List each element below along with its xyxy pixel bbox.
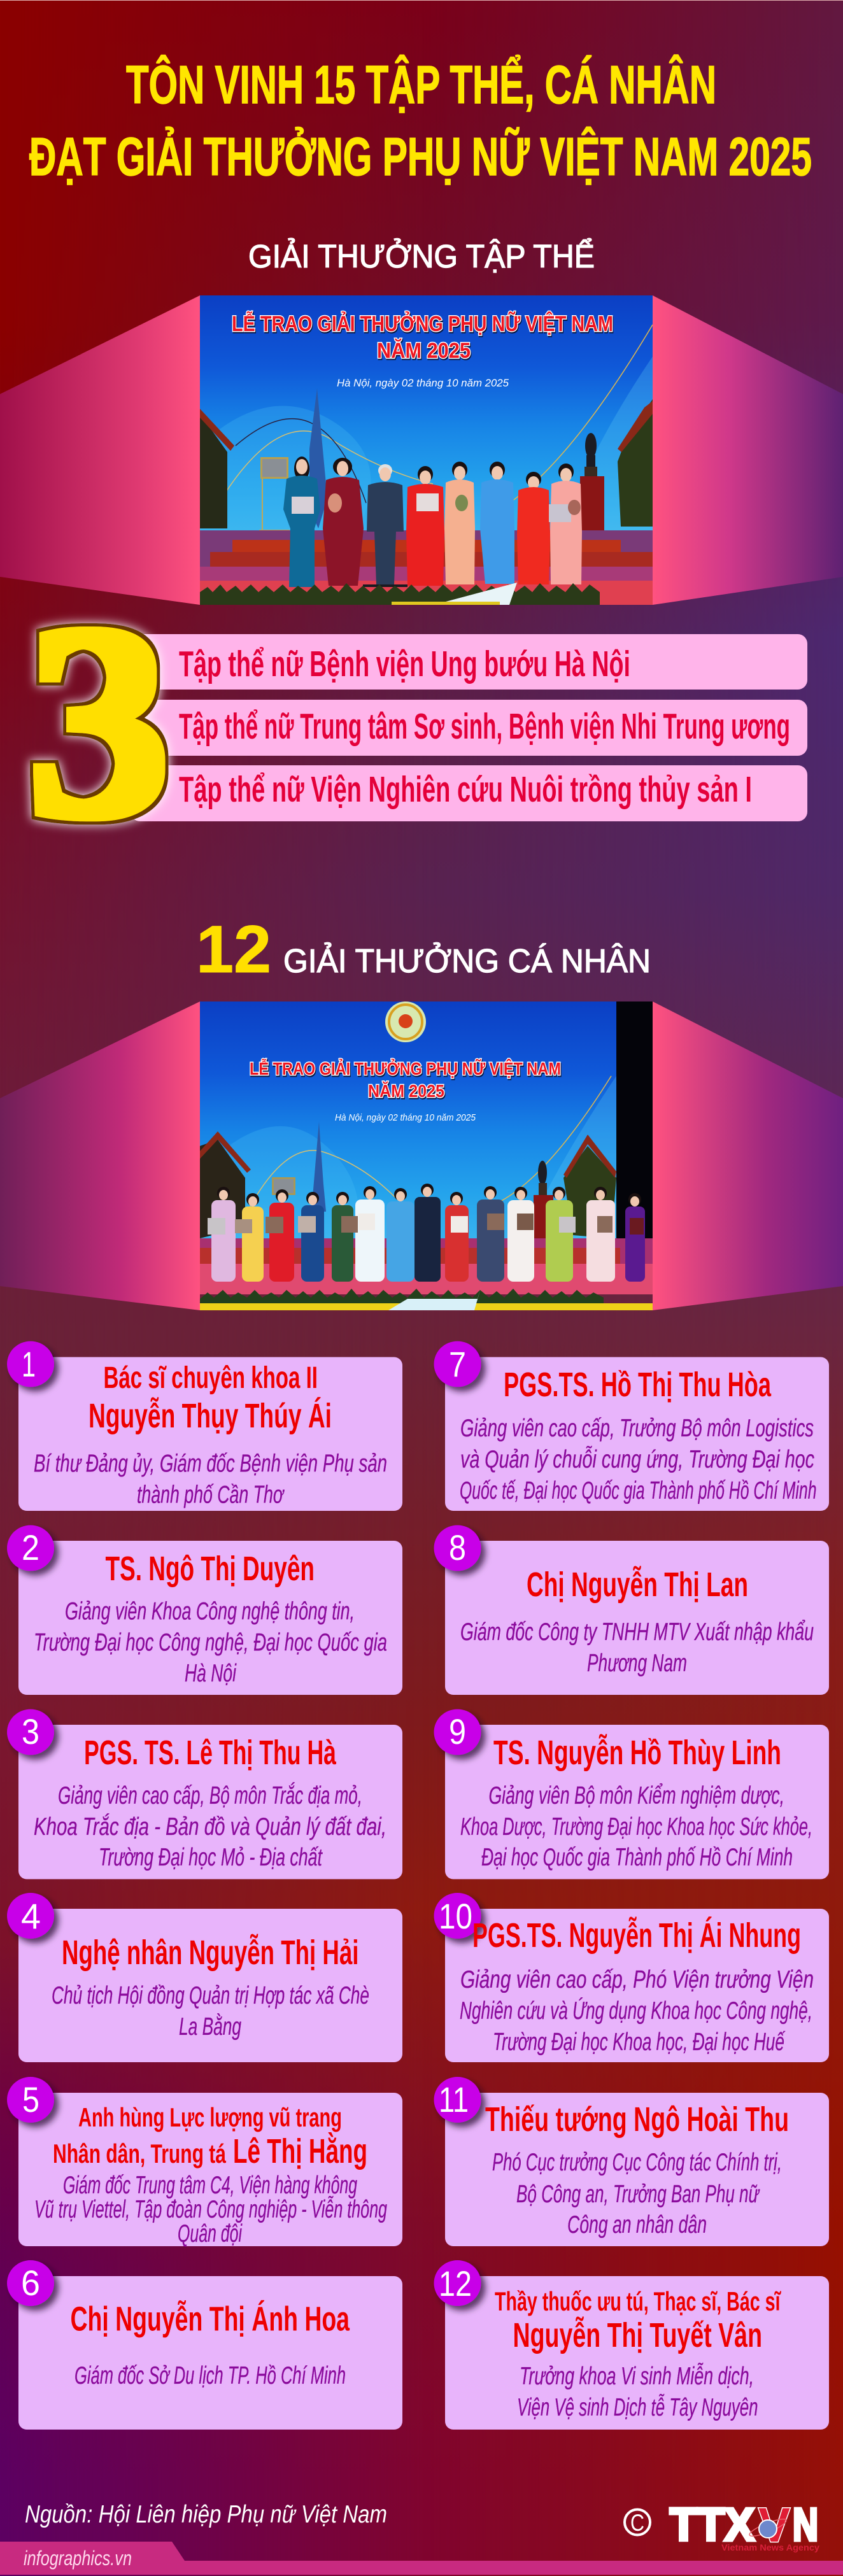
badge 9: 9 xyxy=(449,1711,466,1752)
top edge xyxy=(0,0,843,1)
heading: collective awards: GIẢI THƯỞNG TẬP THỂ xyxy=(248,237,595,274)
award bar 1: Tập thể nữ Bệnh viện Ung bướu Hà Nội xyxy=(179,644,630,684)
copyright symbol xyxy=(625,2510,650,2536)
logo: TTXVN: TTX xyxy=(670,2500,754,2551)
card 5: Quân đội xyxy=(178,2220,243,2247)
panel: right wing, photo 1 xyxy=(653,295,843,605)
figures in photo 2 xyxy=(208,1184,645,1282)
badge 11: 11 xyxy=(439,2079,469,2120)
badge 3: 3 xyxy=(22,1711,39,1752)
card 5: Anh hùng Lực lượng vũ trang xyxy=(78,2102,342,2132)
logo: TTXVN: N xyxy=(793,2500,818,2551)
panel: left wing, photo 1 xyxy=(0,295,200,605)
badge 2 xyxy=(7,1525,54,1571)
card 10 xyxy=(434,1893,829,2062)
emblem xyxy=(385,1001,426,1042)
card 4 xyxy=(7,1893,402,2062)
card 5: Vũ trụ Viettel, Tập đoàn Công nghiệp - Viễn thông xyxy=(34,2195,387,2223)
photo: collective award ceremony xyxy=(200,295,653,605)
logo: TTXVN: Vietnam News Agency xyxy=(721,2542,819,2552)
badge 6 xyxy=(7,2260,54,2306)
card 1: Bí thư Đảng ủy, Giám đốc Bệnh viện Phụ sản xyxy=(34,1450,387,1477)
card 11 xyxy=(434,2077,829,2246)
badge 11 xyxy=(434,2077,481,2123)
card 2: Trường Đại học Công nghệ, Đại học Quốc gia xyxy=(34,1629,387,1657)
panel: three collective awards xyxy=(27,568,807,875)
photo: individual award ceremony: LỄ TRAO GIẢI THƯỞNG PHỤ NỮ VIỆT NAM xyxy=(250,1058,561,1079)
card 2: TS. Ngô Thị Duyên xyxy=(106,1550,315,1588)
panel: right wing, photo 2 xyxy=(653,1001,843,1310)
card 4: Nghệ nhân Nguyễn Thị Hải xyxy=(62,1934,359,1972)
card 6: Giám đốc Sở Du lịch TP. Hồ Chí Minh xyxy=(74,2362,346,2389)
card 3: Giảng viên cao cấp, Bộ môn Trắc địa mỏ, xyxy=(58,1782,362,1809)
badge 6: 6 xyxy=(21,2263,40,2303)
card 11: Công an nhân dân xyxy=(567,2211,707,2239)
badge 8: 8 xyxy=(449,1527,466,1568)
badge 4: 4 xyxy=(21,1896,41,1936)
card 6 xyxy=(7,2260,402,2430)
badge 8 xyxy=(434,1525,481,1571)
footer strip xyxy=(0,2542,843,2575)
award bar 1 xyxy=(131,634,807,690)
badge 5: 5 xyxy=(22,2079,39,2120)
footer website: infographics.vn xyxy=(24,2547,132,2570)
badge 7 xyxy=(434,1341,481,1387)
panel: left wing, photo 2 xyxy=(0,1001,200,1310)
award bar 2 xyxy=(131,700,807,756)
card 1 xyxy=(7,1341,402,1511)
card 8: Chị Nguyễn Thị Lan xyxy=(527,1566,748,1604)
photo: collective award ceremony: Hà Nội, ngày 02 tháng 10 năm 2025 xyxy=(337,377,509,389)
heading: individual awards xyxy=(196,912,651,987)
badge 1 xyxy=(7,1341,54,1387)
heading: individual awards: GIẢI THƯỞNG CÁ NHÂN xyxy=(283,942,651,980)
badge 1: 1 xyxy=(22,1344,36,1384)
card 3: Trường Đại học Mỏ - Địa chất xyxy=(99,1844,323,1871)
card 8: Phương Nam xyxy=(587,1650,687,1677)
card 4: La Bằng xyxy=(179,2013,241,2041)
title xyxy=(29,55,812,187)
card 5: Nhân dân, Trung tá xyxy=(53,2139,226,2169)
card 5: Giám đốc Trung tâm C4, Viện hàng không xyxy=(63,2172,357,2199)
logo: TTXVN xyxy=(670,2498,819,2552)
card 2 xyxy=(7,1525,402,1695)
badge 10: 10 xyxy=(439,1896,472,1936)
card 12 xyxy=(434,2260,829,2430)
logo: TTXVN: V xyxy=(758,2498,790,2552)
photo: individual award ceremony: Hà Nội, ngày 02 tháng 10 năm 2025 xyxy=(335,1112,476,1123)
photo: individual award ceremony: NĂM 2025 xyxy=(368,1081,444,1101)
card 1: thành phố Cần Thơ xyxy=(137,1481,285,1509)
card 3 xyxy=(7,1709,402,1879)
card 5: Lê Thị Hằng xyxy=(233,2132,367,2170)
heading: individual awards: 12 xyxy=(196,912,271,987)
card 7 xyxy=(434,1341,829,1511)
card 3: Khoa Trắc địa - Bản đồ và Quản lý đất đai, xyxy=(34,1813,386,1841)
badge 7: 7 xyxy=(449,1344,466,1384)
copyright symbol: C xyxy=(630,2510,644,2536)
card 2: Hà Nội xyxy=(185,1660,237,1687)
badge 12: 12 xyxy=(439,2263,472,2304)
badge 5 xyxy=(7,2077,54,2123)
badge 2: 2 xyxy=(22,1527,39,1568)
big number 3: 3 xyxy=(27,568,171,875)
card 9 xyxy=(434,1709,829,1879)
photo: collective award ceremony: NĂM 2025 xyxy=(377,339,471,363)
source note: Nguồn: Hội Liên hiệp Phụ nữ Việt Nam xyxy=(25,2501,387,2528)
card 3: PGS. TS. Lê Thị Thu Hà xyxy=(84,1734,337,1772)
card 2: Giảng viên Khoa Công nghệ thông tin, xyxy=(65,1598,355,1625)
badge 9 xyxy=(434,1709,481,1755)
badge 4 xyxy=(7,1893,54,1939)
card 5 xyxy=(7,2077,402,2247)
photo: individual award ceremony xyxy=(200,1001,653,1310)
card 6: Chị Nguyễn Thị Ánh Hoa xyxy=(70,2300,350,2338)
card 1: Bác sĩ chuyên khoa II xyxy=(103,1361,318,1395)
badge 3 xyxy=(7,1709,54,1755)
card 1: Nguyễn Thụy Thúy Ái xyxy=(89,1397,332,1435)
card 4: Chủ tịch Hội đồng Quản trị Hợp tác xã Chè xyxy=(52,1982,369,2009)
card 8 xyxy=(434,1525,829,1695)
figures in photo 1 xyxy=(283,456,582,587)
award bar 3 xyxy=(131,765,807,821)
